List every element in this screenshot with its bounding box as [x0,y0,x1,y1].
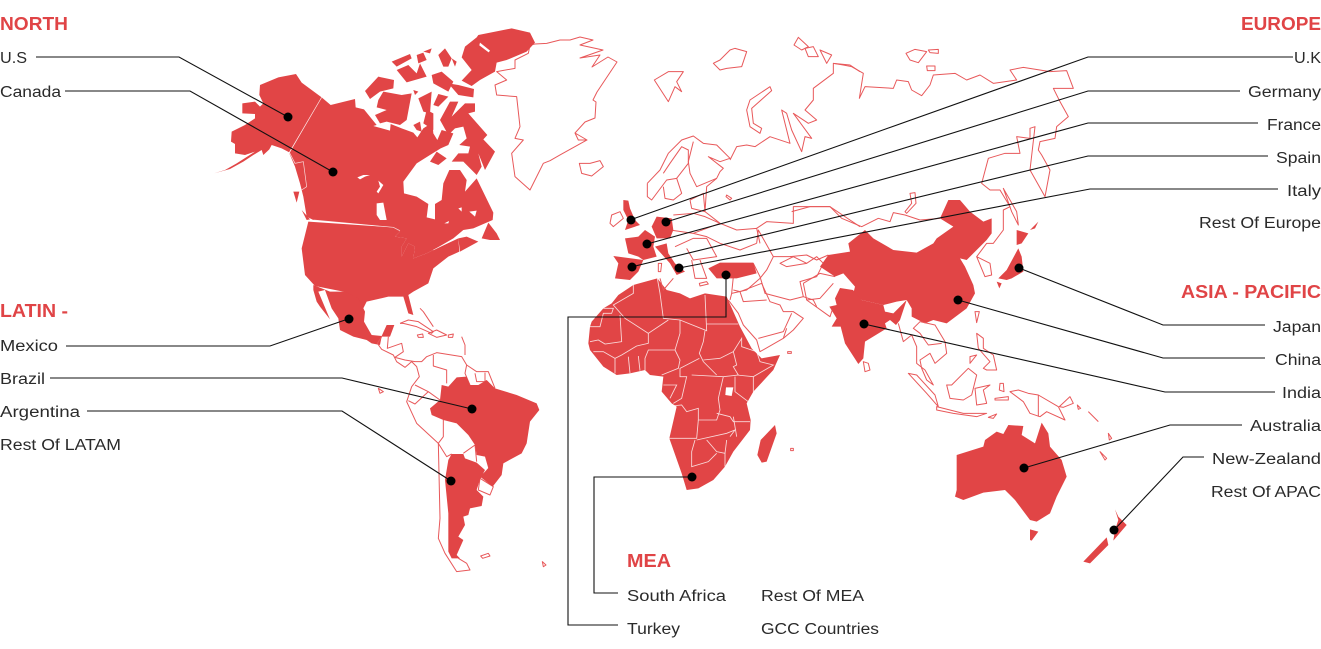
india [829,288,907,364]
japan [997,222,1038,288]
russia north coast [730,63,860,160]
scandinavia [647,178,682,200]
united states [302,222,459,315]
china [820,200,992,323]
heading: north: NORTH [0,14,68,34]
africa mainland [588,278,780,490]
canada islands [293,28,535,252]
lake [725,387,733,396]
turkey [708,263,757,278]
small islands [788,352,793,451]
mexico and latin america [313,285,546,572]
argentina [445,454,485,558]
panel: mea labels: GCC Countries [761,621,879,638]
madagascar [757,425,777,463]
eastern europe borders [658,178,860,307]
australia [955,423,1067,522]
canada [289,97,493,258]
panel: mea labels: South Africa [627,588,726,605]
central america outline [377,337,470,572]
asia east [790,49,1073,323]
panel: asia pacific labels: China [1275,352,1321,369]
panel: latin labels [0,301,121,454]
panel: latin labels: Rest Of LATAM [0,437,121,454]
new zealand [1083,509,1127,563]
panel: europe labels: France [1267,117,1321,134]
panel: europe labels: U.K [1294,50,1321,67]
arabian peninsula outline [728,283,803,352]
iceland [579,161,603,176]
southeast asia outline [863,312,1112,460]
brazil [430,377,539,487]
germany [652,217,673,238]
heading: latin: LATIN - [0,301,68,321]
panel: asia pacific labels: New-Zealand [1212,451,1321,468]
canada lakes [357,43,490,223]
panel: latin labels: Argentina [0,404,80,421]
africa borders [590,278,773,467]
panel: europe labels: Spain [1276,150,1321,167]
tasmania [1030,529,1038,541]
india and oceania [829,288,1127,563]
france [625,230,657,260]
panel: europe labels: Rest Of Europe [1199,215,1321,232]
asia west and europe [579,37,860,307]
panel: mea labels: Rest Of MEA [761,588,865,605]
central asia borders [790,255,835,317]
greenland outline [495,37,617,190]
north america [214,28,617,315]
panel: north labels: U.S [0,50,27,67]
panel: asia pacific labels [1181,282,1321,501]
alaska [214,74,322,173]
heading: europe: EUROPE [1241,14,1321,34]
heading: mea: MEA [627,551,671,571]
panel: latin labels: Brazil [0,371,45,388]
world map [214,28,1127,572]
panel: asia pacific labels: India [1282,385,1321,402]
panel: europe labels: Germany [1248,84,1321,101]
russia-mongolia border [792,207,940,227]
caribbean islands outline [378,308,546,567]
panel: mea labels: Turkey [627,621,680,638]
mexico [313,285,394,345]
panel: asia pacific labels: Rest Of APAC [1211,484,1321,501]
spain [613,256,643,280]
panel: asia pacific labels: Japan [1273,319,1321,336]
borders [289,97,460,250]
united kingdom [623,200,640,230]
russia east coast [833,63,1073,277]
panel: latin labels: Mexico [0,338,58,355]
panel: europe labels [1199,14,1321,232]
africa [588,278,803,490]
panel: mea labels [627,551,879,638]
panel: north labels: Canada [0,84,61,101]
panel: north labels [0,14,68,101]
location dots [284,112,1118,534]
heading: asia pacific: ASIA - PACIFIC [1181,282,1321,302]
panel: asia pacific labels: Australia [1250,418,1321,435]
arctic islands [654,37,832,102]
panel: europe labels: Italy [1287,183,1321,200]
italy [655,243,685,275]
